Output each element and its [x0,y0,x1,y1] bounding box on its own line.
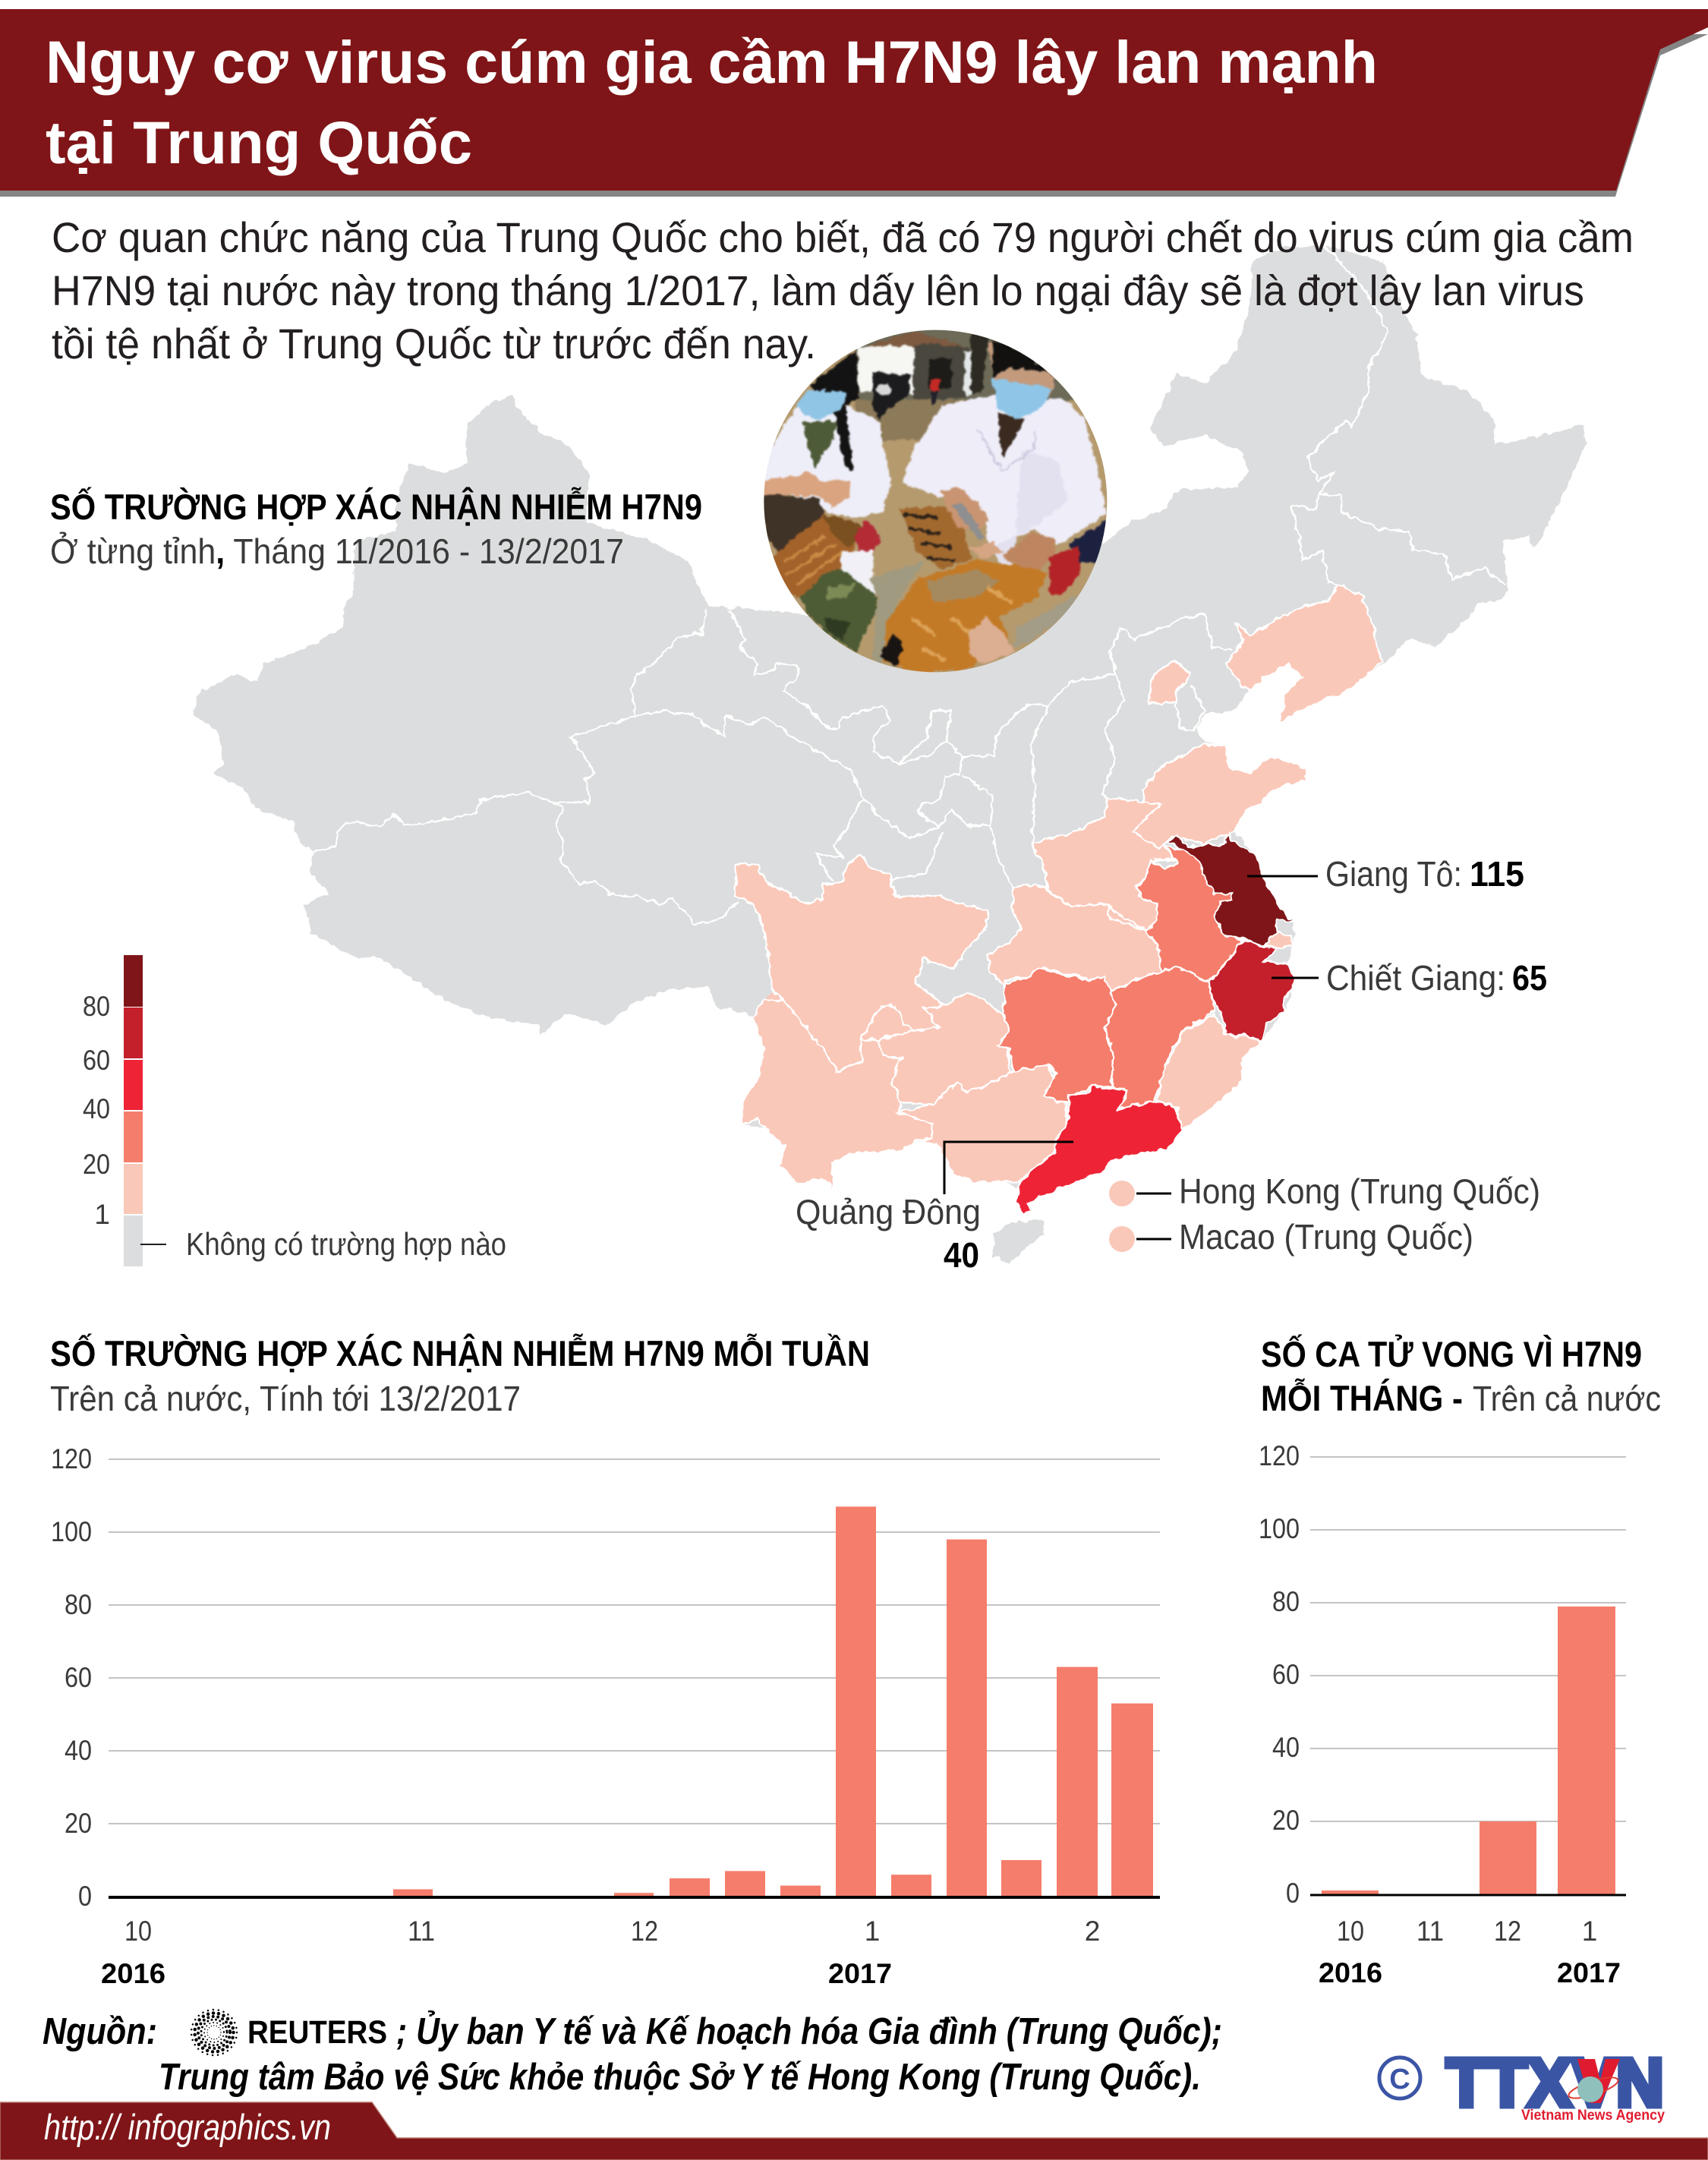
weekly bar chart [51,1443,1160,1989]
province: Jiangsu [1168,832,1294,945]
province borders in grey area [314,244,1505,923]
monthly bar chart: 0 [1286,1878,1300,1909]
camo trousers [799,568,876,651]
weekly bar chart: 20 [65,1808,92,1839]
province: Shandong [1133,744,1308,848]
source credits: REUTERS [247,2014,387,2051]
callout: Giang Tô: Giang Tô: [1325,854,1462,894]
weekly bar chart: 10 [124,1916,152,1947]
callout: Chiết Giang: 65 [1512,958,1547,998]
left chicken [764,493,826,553]
weekly bar chart: 2016 [101,1958,165,1989]
province: Beijing [1149,660,1191,703]
intro text: H7N9 tại nước này trong tháng 1/2017, làm dấy lên lo ngại đây sẽ là đợt lây lan virus [52,266,1584,314]
province: Guizhou [878,992,1009,1104]
province: Fujian [1157,1014,1261,1130]
weekly bar chart: 120 [51,1443,92,1474]
province: Hainan [994,1221,1043,1263]
intro text [52,213,1634,367]
logo: TTXVN Vietnam News Agency: C [1389,2064,1410,2095]
province: Guangdong [1016,1086,1183,1214]
source credits: Trung tâm Bảo vệ Sức khỏe thuộc Sở Y tế Hong Kong (Trung Quốc). [159,2057,1201,2098]
colour legend: 60 [83,1045,110,1076]
monthly bar chart: 11 [1417,1916,1444,1947]
monthly bar chart [1259,1440,1626,1988]
callout: Quảng Đông: Quảng Đông [796,1192,981,1231]
monthly bar chart: 2017 [1557,1957,1621,1988]
province: Liaoning [1226,585,1382,725]
callout: Quảng Đông: 40 [944,1235,979,1275]
intro text: tồi tệ nhất ở Trung Quốc từ trước đến nay. [52,320,816,367]
province: Hubei [988,884,1163,992]
weekly bar chart: 2017 [828,1958,892,1989]
callout: Chiết Giang: Chiết Giang: [1326,958,1505,998]
monthly chart heading: Trên cả nước [1473,1379,1661,1418]
monthly chart heading [1261,1334,1661,1418]
province: Sichuan [736,856,988,1071]
province: Hunan [997,967,1116,1104]
province: Henan [1032,797,1174,931]
monthly bar chart: 100 [1259,1513,1300,1544]
title [46,28,1378,176]
title: Nguy cơ virus cúm gia cầm H7N9 lây lan mạnh [46,28,1378,96]
header banner [0,9,1708,197]
weekly bar chart: 0 [78,1881,92,1912]
logo: TTXVN Vietnam News Agency: TTXVN [1446,2045,1664,2121]
weekly bar chart: 1 [865,1916,880,1947]
province: Yunnan [742,998,933,1190]
province: grey mainland [193,244,1586,1194]
weekly bar chart: 12 [631,1916,658,1947]
monthly bar chart: 40 [1272,1732,1300,1763]
weekly bar chart: 11 [408,1916,435,1947]
colour legend [83,955,506,1266]
monthly bar chart: 1 [1582,1916,1597,1947]
source credits [43,2010,1222,2098]
map of China [193,244,1586,1263]
map heading: SỐ TRƯỜNG HỢP XÁC NHẬN NHIỄM H7N9 [50,487,702,527]
weekly bar chart: 60 [65,1662,92,1693]
source credits: ; Ủy ban Y tế và Kế hoạch hóa Gia đình (Trung Quốc); [396,2010,1222,2052]
footer bar with URL [0,2102,1708,2160]
pink underlay: central provinces [1007,892,1165,979]
right chicken [883,560,1048,673]
monthly chart heading: SỐ CA TỬ VONG VÌ H7N9 [1261,1334,1642,1374]
title: tại Trung Quốc [46,109,472,176]
weekly bar chart: 100 [51,1516,92,1547]
province: Guangxi [898,1064,1067,1183]
callout: Quảng Đông [796,1142,1073,1275]
left person [761,405,891,518]
province: Shanghai [1264,932,1294,948]
weekly bar chart: 2 [1085,1916,1100,1947]
weekly chart heading [50,1333,870,1418]
right person [902,395,1107,550]
monthly bar chart: 80 [1272,1586,1300,1617]
pink underlay: south-west provinces [753,929,919,1082]
icon: Reuters dot logo [191,2010,237,2055]
province: Anhui [1136,846,1241,983]
province: Jiangxi [1105,967,1215,1108]
callout: Hong Kong: Hong Kong (Trung Quốc) [1179,1171,1540,1211]
logo: TTXVN Vietnam News Agency: Vietnam News Agency [1521,2108,1665,2124]
weekly chart heading: SỐ TRƯỜNG HỢP XÁC NHẬN NHIỄM H7N9 MỖI TUẦN [50,1333,870,1373]
source credits: Nguồn: [43,2011,157,2052]
weekly bar chart: 80 [65,1589,92,1620]
right arms and hands [940,487,988,531]
callout: Giang Tô [1247,854,1524,894]
monthly bar chart: 12 [1494,1916,1521,1947]
callout: Giang Tô: 115 [1470,854,1524,894]
map heading [50,487,702,571]
khaki trousers [871,562,924,668]
colour legend: 1 [94,1199,110,1230]
weekly bar chart: 40 [65,1735,92,1766]
colour legend: Không có trường hợp nào [186,1226,506,1262]
right wing [900,506,972,568]
monthly bar chart: 60 [1272,1659,1300,1690]
monthly bar chart: 20 [1272,1805,1300,1836]
monthly bar chart: 120 [1259,1440,1300,1471]
photo: vets vaccinating chickens [764,330,1107,673]
footer bar with URL: http:// infographics.vn [44,2107,331,2147]
map heading: Ở từng tỉnh, Tháng 11/2016 - 13/2/2017 [50,531,624,571]
monthly bar chart: 2016 [1319,1957,1382,1988]
intro text: Cơ quan chức năng của Trung Quốc cho biết, đã có 79 người chết do virus cúm gia cầm [52,213,1634,261]
colour legend: 80 [83,991,110,1022]
province: Zhejiang [1209,939,1294,1041]
monthly bar chart: 10 [1337,1916,1364,1947]
callout: Macao: Macao (Trung Quốc) [1179,1217,1473,1257]
monthly chart heading: MỖI THÁNG - [1261,1378,1463,1418]
colour legend: 40 [83,1093,110,1124]
colour legend: 20 [83,1149,110,1180]
weekly chart heading: Trên cả nước, Tính tới 13/2/2017 [50,1379,521,1418]
